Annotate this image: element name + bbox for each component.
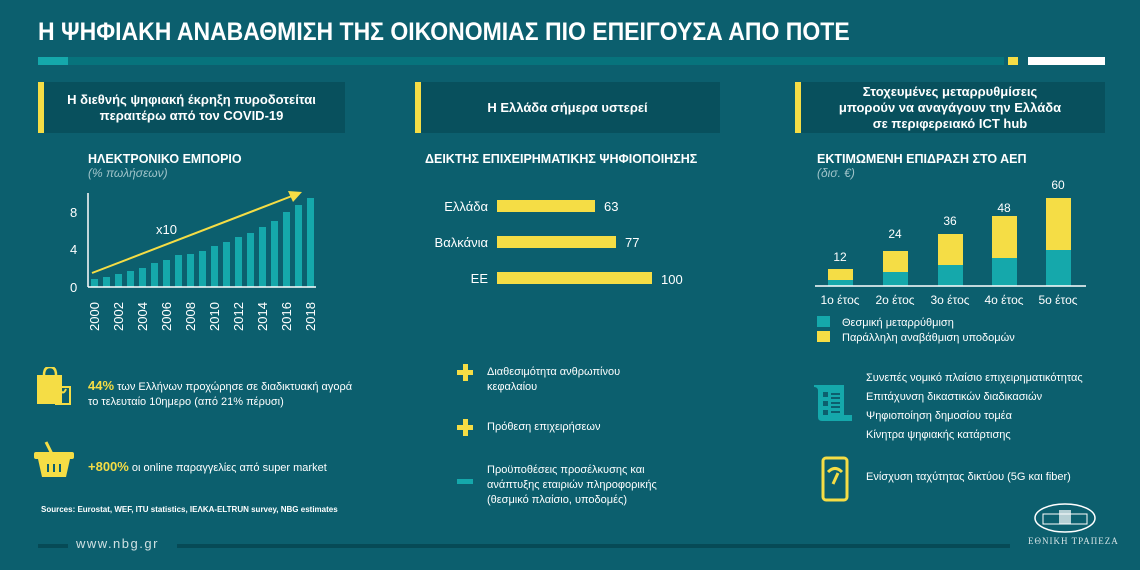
reforms list: Συνεπές νομικό πλαίσιο επιχειρηματικότητας [866,372,1083,384]
stacked bar chart: GDP impact: 12 [833,250,847,264]
bar chart: e-commerce: 2000 [87,302,102,331]
item: human capital: Διαθεσιμότητα ανθρωπίνου [487,366,620,378]
stacked bar chart: GDP impact: 48 [997,201,1011,215]
bar chart: e-commerce: 2004 [135,302,150,331]
chart title: e-commerce: (% πωλήσεων) [88,166,168,180]
bar chart: e-commerce: 2018 [303,302,318,331]
panel header: ict hub: Στοχευμένες μεταρρυθμίσεις [863,84,1037,98]
bar chart: e-commerce: 2014 [255,302,270,331]
panel header: ict hub [795,82,1105,133]
legend [817,316,1015,344]
stat: 44%: το τελευταίο 10ημερο (από 21% πέρυσι) [88,396,284,408]
item: ICT prerequisites: (θεσμικό πλαίσιο, υποδομές) [487,494,627,506]
icon: shopping bag [37,367,71,405]
chart title: GDP impact: (δισ. €) [817,166,855,180]
panel header: ict hub: μπορούν να αναγάγουν την Ελλάδα [839,100,1061,114]
stat: 44%: 44% των Ελλήνων προχώρησε σε διαδικτυακή αγορά [88,378,352,393]
text: www.nbg.gr [76,536,159,551]
bar chart: digitization index: Ελλάδα [444,199,488,214]
chart title: GDP impact [817,152,1026,180]
bar chart: e-commerce: 0 [70,280,77,295]
icon: checklist scroll [814,385,852,421]
reforms list [866,372,1083,441]
panel header: covid: Η διεθνής ψηφιακή έκρηξη πυροδοτείται [67,92,316,106]
chart title: e-commerce [88,152,242,180]
sources: Sources: Eurostat, WEF, ITU statistics, ΙΕΛΚΑ-ELTRUN survey, NBG estimates [41,505,338,514]
item: ICT prerequisites: Προϋποθέσεις προσέλκυσης και [487,464,645,476]
stat: 44% [88,378,352,408]
panel header: greece [415,82,720,133]
bar chart: e-commerce: 2012 [231,302,246,331]
bar chart: e-commerce: 2006 [159,302,174,331]
reforms list: Κίνητρα ψηφιακής κατάρτισης [866,429,1011,441]
reforms list: Επιτάχυνση δικαστικών διαδικασιών [866,391,1042,403]
bar chart: digitization index: 100 [661,272,683,287]
item: human capital: κεφαλαίου [487,381,537,393]
chart title: digitization index: ΔΕΙΚΤΗΣ ΕΠΙΧΕΙΡΗΜΑΤΙΚΗΣ ΨΗΦΙΟΠΟΙΗΣΗΣ [425,152,697,166]
bar chart: digitization index: 77 [625,235,639,250]
icon: phone speedometer [822,456,848,502]
bar chart: e-commerce: 2016 [279,302,294,331]
title: Η ΨΗΦΙΑΚΗ ΑΝΑΒΑΘΜΙΣΗ ΤΗΣ ΟΙΚΟΝΟΜΙΑΣ ΠΙΟ ΕΠΕΙΓΟΥΣΑ ΑΠΟ ΠΟΤΕ [38,18,850,46]
panel header: ict hub: σε περιφερειακό ICT hub [873,116,1027,130]
bar chart: e-commerce: 8 [70,205,77,220]
panel header: covid: περαιτέρω από τον COVID-19 [100,108,283,122]
icon: basket [34,441,74,477]
bar chart: e-commerce [70,191,318,331]
footer [38,544,68,548]
title rule [38,57,1105,65]
item: business intent: Πρόθεση επιχειρήσεων [487,421,601,433]
chart title: e-commerce: ΗΛΕΚΤΡΟΝΙΚΟ ΕΜΠΟΡΙΟ [88,152,242,166]
reforms list: Ψηφιοποίηση δημοσίου τομέα [866,410,1012,422]
panel header: greece: Η Ελλάδα σήμερα υστερεί [487,100,648,114]
bar chart: e-commerce: 4 [70,242,77,257]
bar chart: digitization index: ΕΕ [471,271,488,286]
item: human capital [457,364,620,393]
legend: Παράλληλη αναβάθμιση υποδομών [842,332,1015,344]
stacked bar chart: GDP impact: 24 [888,227,902,241]
bar chart: digitization index: Βαλκάνια [435,235,488,250]
logo: national bank [1028,503,1119,546]
legend: Θεσμική μεταρρύθμιση [842,317,954,329]
reform: network speed: Ενίσχυση ταχύτητας δικτύου (5G και fiber) [866,471,1071,483]
item: business intent [457,419,601,436]
panel header: covid [38,82,345,133]
bar chart: e-commerce: 2008 [183,302,198,331]
bar chart: digitization index [435,199,683,287]
chart title: GDP impact: ΕΚΤΙΜΩΜΕΝΗ ΕΠΙΔΡΑΣΗ ΣΤΟ ΑΕΠ [817,152,1026,166]
logo: national bank: ΕΘΝΙΚΗ ΤΡΑΠΕΖΑ [1028,536,1119,546]
stacked bar chart: GDP impact [815,178,1086,305]
stacked bar chart: GDP impact: 60 [1051,178,1065,192]
bar chart: e-commerce: x10 [156,222,177,237]
bar chart: e-commerce: 2002 [111,302,126,331]
bar chart: e-commerce: 2010 [207,302,222,331]
bar chart: digitization index: 63 [604,199,618,214]
item: ICT prerequisites: ανάπτυξης εταιριών πληροφορικής [487,479,657,491]
item: ICT prerequisites [457,464,657,506]
stacked bar chart: GDP impact: 36 [943,214,957,228]
stat: +800%: +800% οι online παραγγελίες από super market [88,459,327,474]
